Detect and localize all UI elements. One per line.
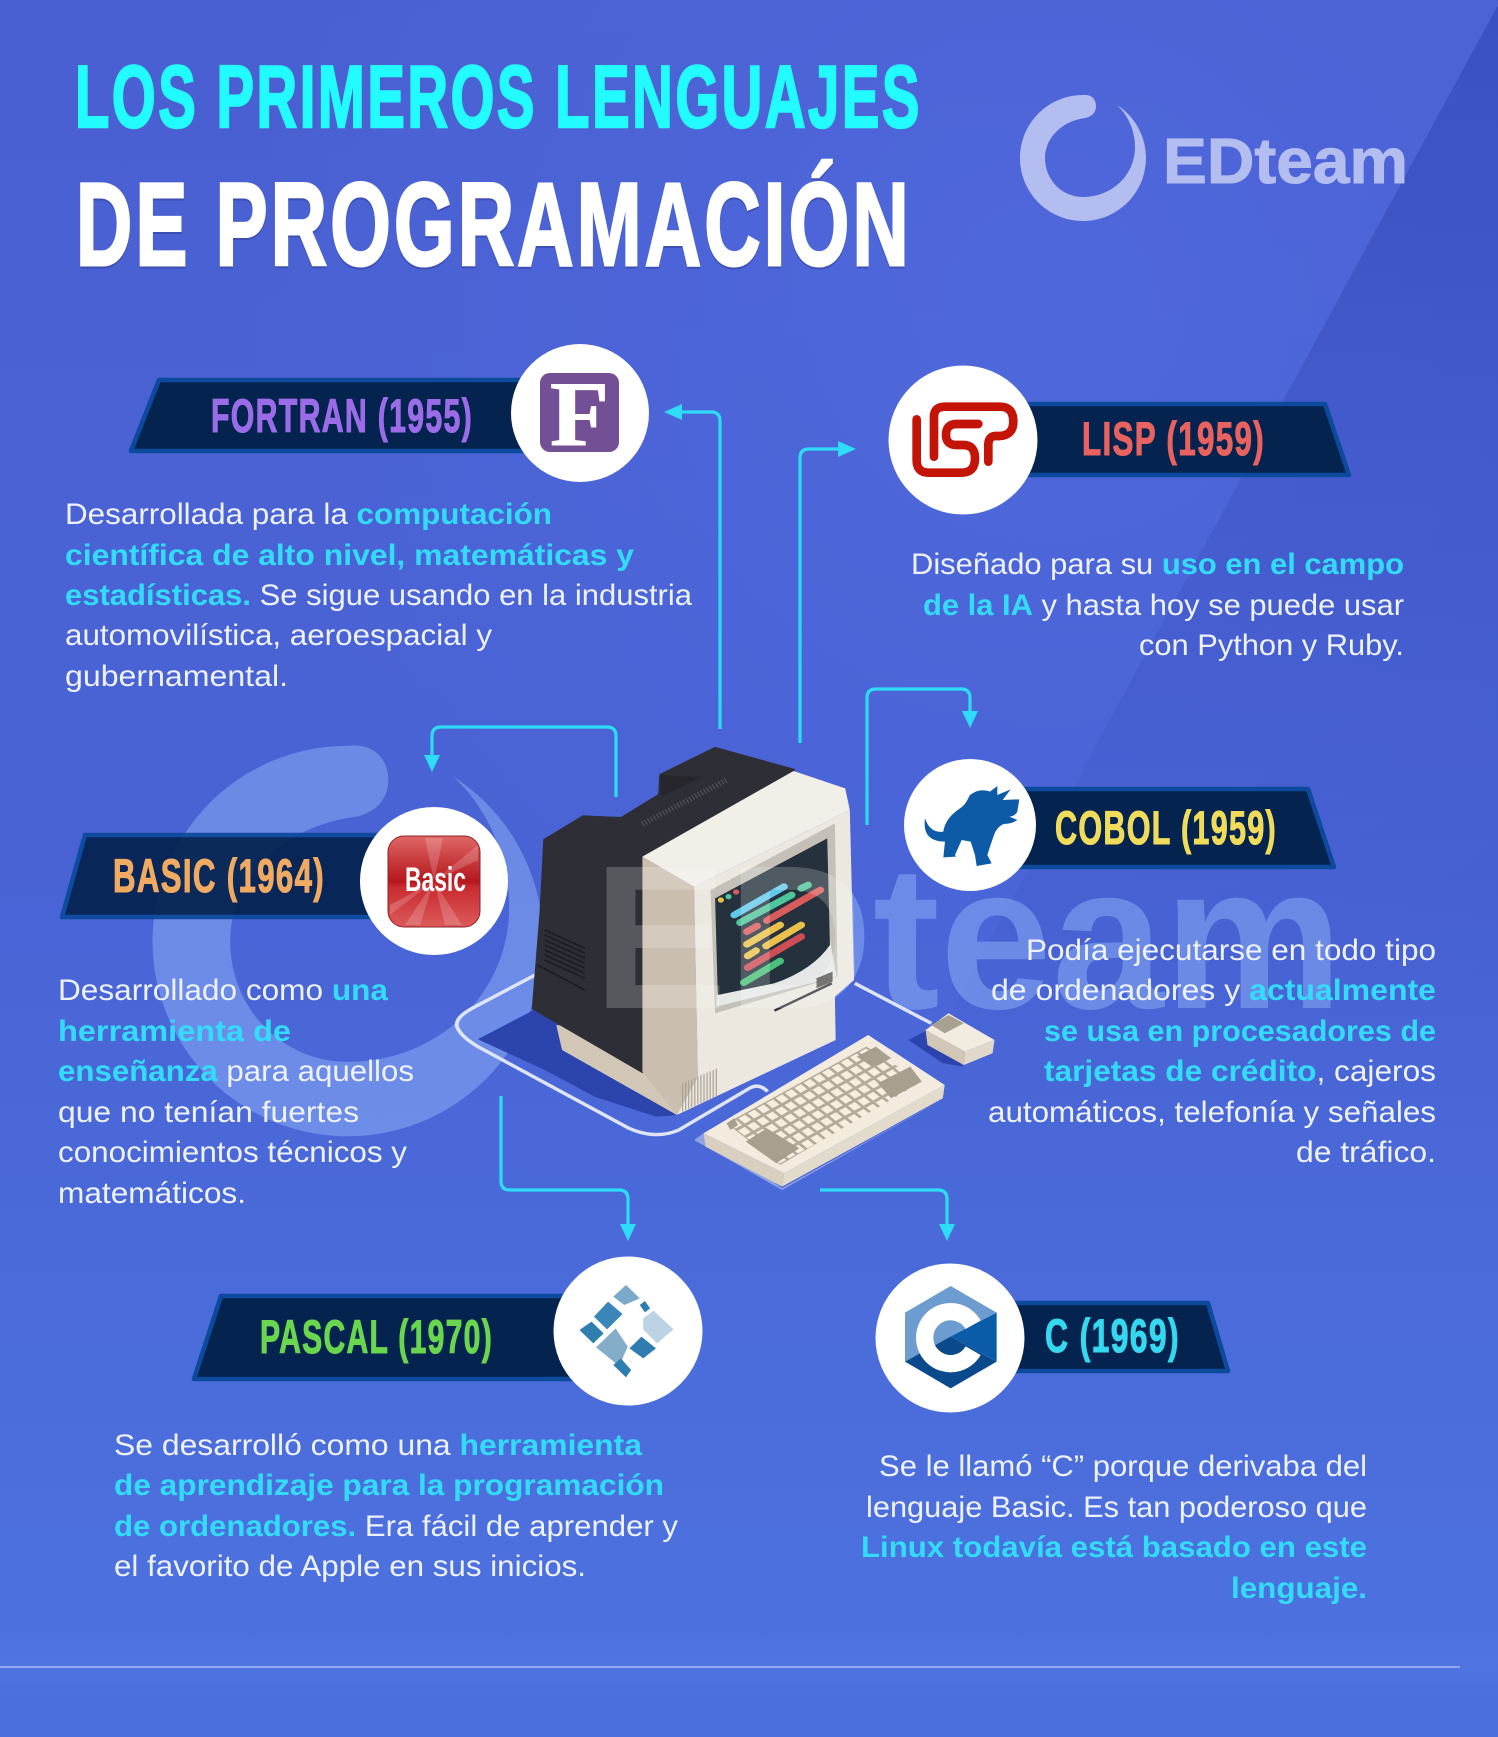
arrow: computer to C	[820, 1190, 955, 1241]
panel: BASIC	[58, 807, 508, 1210]
logo ring	[1020, 95, 1146, 221]
keys grid	[727, 1047, 922, 1165]
BASIC description: enseñanza para aquellos	[58, 1055, 414, 1088]
grey keys	[727, 1047, 922, 1163]
panel: FORTRAN	[65, 344, 692, 693]
logo wordmark: EDteam	[1163, 125, 1408, 197]
arrow: computer to Pascal	[501, 1096, 636, 1241]
title	[75, 47, 922, 291]
PASCAL description: Se desarrolló como una herramienta	[114, 1429, 642, 1462]
footer divider	[0, 1666, 1460, 1668]
COBOL description: tarjetas de crédito , cajeros	[1044, 1055, 1436, 1088]
BASIC description: herramienta de	[58, 1015, 291, 1048]
BASIC label: BASIC (1964)	[113, 849, 325, 902]
BASIC banner	[62, 835, 400, 917]
monitor back	[533, 748, 794, 1072]
monitor side panel	[642, 857, 698, 1115]
COBOL description: de tráfico.	[1296, 1136, 1436, 1169]
FORTRAN description: Desarrollada para la computación	[65, 498, 552, 531]
FORTRAN banner	[131, 380, 600, 451]
base	[556, 1025, 683, 1115]
FORTRAN description: científica de alto nivel, matemáticas y	[65, 539, 634, 572]
icon: Cobol rhino	[904, 759, 1036, 891]
arrow: computer to Cobol	[867, 689, 978, 825]
icon: Basic: Basic	[405, 861, 466, 899]
FORTRAN description: automovilística, aeroespacial y	[65, 619, 492, 652]
panel: PASCAL	[114, 1256, 702, 1583]
screen glow	[716, 940, 836, 1007]
screen bezel	[711, 823, 838, 1013]
C banner	[970, 1303, 1228, 1371]
C label: C (1969)	[1045, 1309, 1180, 1362]
FORTRAN label: FORTRAN (1955)	[211, 389, 473, 442]
LISP description: Diseñado para su uso en el campo	[911, 548, 1404, 581]
PASCAL description: de ordenadores. Era fácil de aprender y	[114, 1510, 678, 1543]
icon: C	[876, 1264, 1024, 1412]
PASCAL label: PASCAL (1970)	[260, 1310, 493, 1363]
arrow: computer to Lisp	[800, 441, 856, 743]
logo: EDteam	[1020, 95, 1408, 221]
COBOL label: COBOL (1959)	[1055, 801, 1277, 854]
BASIC description: que no tenían fuertes	[58, 1096, 359, 1129]
arrow: computer to Basic	[424, 727, 616, 797]
C description	[861, 1450, 1367, 1605]
screen	[715, 838, 830, 995]
LISP description: con Python y Ruby.	[1139, 629, 1404, 662]
mouse	[908, 1013, 994, 1067]
keyboard	[694, 1035, 945, 1190]
panel: C	[861, 1264, 1367, 1605]
title line 1: LOS PRIMEROS LENGUAJES	[75, 47, 922, 146]
cables	[457, 975, 931, 1135]
LISP label: LISP (1959)	[1082, 412, 1265, 465]
icon: Fortran: F	[550, 363, 609, 465]
COBOL description	[988, 934, 1436, 1169]
panel: COBOL	[904, 759, 1436, 1169]
monitor front panel	[677, 810, 854, 1115]
PASCAL description: de aprendizaje para la programación	[114, 1469, 664, 1502]
PASCAL description: el favorito de Apple en sus inicios.	[114, 1550, 586, 1583]
C description: Linux todavía está basado en este	[861, 1531, 1367, 1564]
monitor notch	[661, 775, 702, 797]
top vents	[642, 780, 727, 824]
watermark: EDteam text: EDteam	[593, 823, 1343, 1052]
BASIC description: Desarrollado como una	[58, 974, 388, 1007]
COBOL description: automáticos, telefonía y señales	[988, 1096, 1436, 1129]
LISP description: de la IA y hasta hoy se puede usar	[923, 589, 1404, 622]
computer illustration	[457, 748, 994, 1190]
monitor top panel	[642, 771, 850, 887]
icon: Basic	[360, 807, 508, 955]
FORTRAN description: estadísticas. Se sigue usando en la industria	[65, 579, 692, 612]
COBOL description: se usa en procesadores de	[1044, 1015, 1436, 1048]
C description: lenguaje Basic. Es tan poderoso que	[866, 1491, 1367, 1524]
COBOL banner	[1000, 789, 1334, 867]
LISP banner	[980, 404, 1349, 475]
FORTRAN description: gubernamental.	[65, 660, 288, 693]
title line 2: DE PROGRAMACIÓN	[76, 159, 912, 291]
panel: LISP	[888, 366, 1404, 662]
PASCAL banner	[194, 1296, 640, 1379]
PASCAL description	[114, 1429, 678, 1583]
front vents	[683, 1069, 716, 1112]
FORTRAN description	[65, 498, 692, 693]
BASIC description: matemáticos.	[58, 1177, 246, 1210]
icon: Pascal	[554, 1256, 702, 1406]
floppy slot	[774, 972, 833, 1011]
floor shadow	[478, 1008, 679, 1117]
side vents	[537, 930, 585, 990]
COBOL description: Podía ejecutarse en todo tipo	[1026, 934, 1436, 967]
C description: lenguaje.	[1231, 1572, 1367, 1605]
watermark overlay on computer: EDteam	[593, 823, 1343, 1052]
BASIC description: conocimientos técnicos y	[58, 1136, 407, 1169]
icon: Fortran	[511, 344, 649, 482]
LISP description	[911, 548, 1404, 662]
COBOL description: de ordenadores y actualmente	[991, 974, 1436, 1007]
BASIC description	[58, 974, 414, 1210]
code lines	[718, 885, 820, 983]
watermark: EDteam ring	[153, 745, 543, 1136]
arrow: computer to Fortran	[664, 404, 720, 729]
C description: Se le llamó “C” porque derivaba del	[879, 1450, 1367, 1483]
icon: Lisp	[888, 366, 1038, 514]
